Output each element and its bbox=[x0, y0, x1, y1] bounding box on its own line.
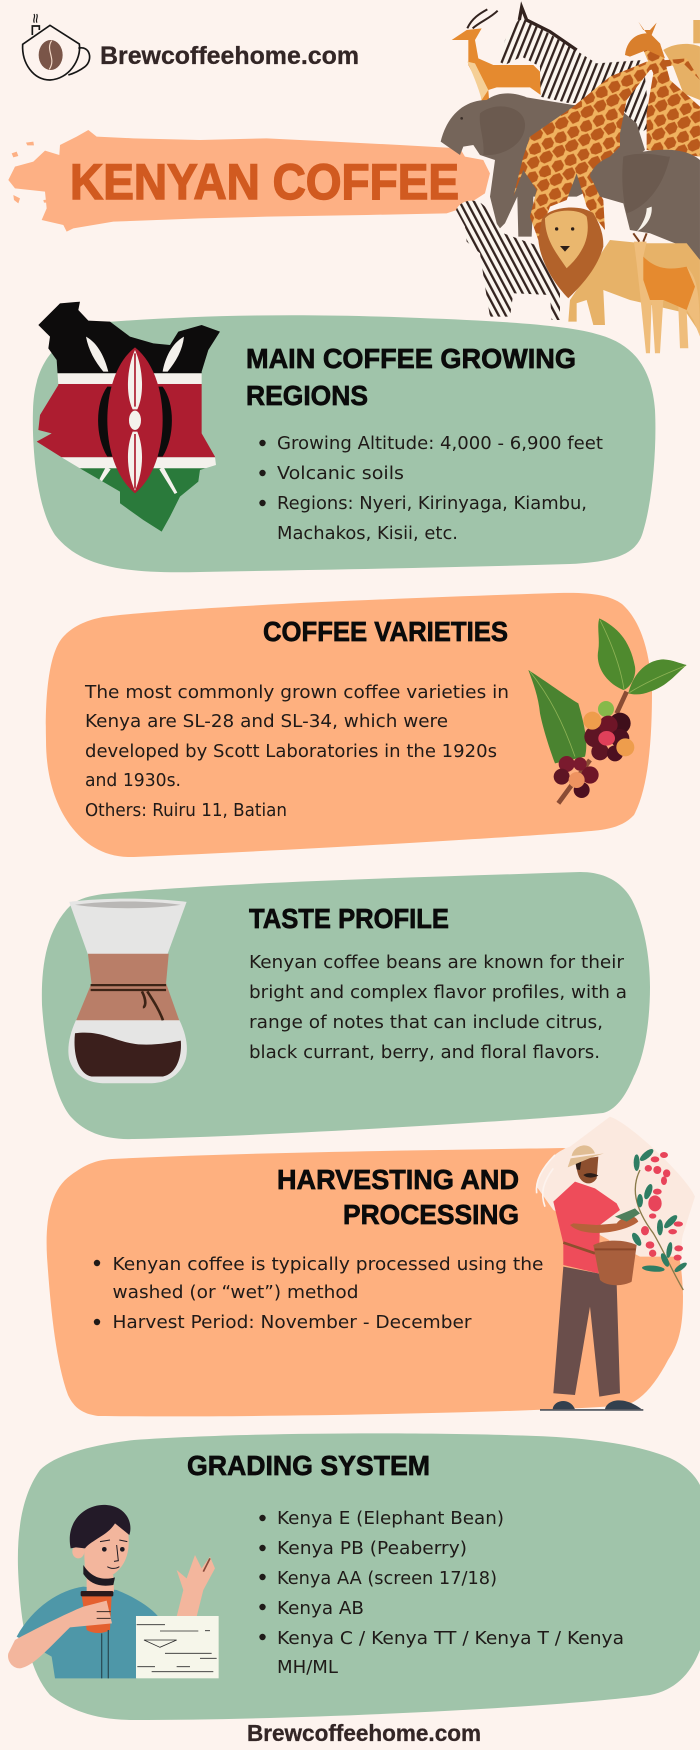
brush stroke bbox=[8, 130, 490, 232]
heading: COFFEE VARIETIES bbox=[263, 616, 508, 647]
bullet list: Kenya PB (Peaberry) bbox=[277, 1539, 467, 1559]
panel: main coffee growing regions bbox=[30, 297, 655, 572]
body text: bright and complex flavor profiles, with a bbox=[249, 983, 627, 1003]
gazelle top bbox=[452, 9, 541, 103]
zebra lower bbox=[456, 201, 560, 320]
heading: MAIN COFFEE GROWING bbox=[246, 343, 576, 374]
body text: range of notes that can include citrus, bbox=[249, 1013, 603, 1033]
body text: black currant, berry, and floral flavors. bbox=[249, 1043, 600, 1063]
panel background bbox=[18, 1433, 700, 1720]
panel: harvesting and processing bbox=[47, 1117, 695, 1416]
bullet list: Harvest Period: November - December bbox=[112, 1313, 472, 1333]
icon: coffee branch bbox=[528, 618, 687, 803]
body text bbox=[84, 683, 509, 821]
bullet list: washed (or “wet”) method bbox=[112, 1283, 358, 1303]
zebra top bbox=[499, 7, 650, 133]
heading: GRADING SYSTEM bbox=[187, 1450, 430, 1481]
body text bbox=[249, 953, 627, 1063]
heading bbox=[277, 1164, 519, 1230]
panel: taste profile bbox=[42, 872, 650, 1139]
title banner bbox=[8, 130, 490, 232]
body text: Kenyan coffee beans are known for their bbox=[249, 953, 625, 973]
bullet list: Volcanic soils bbox=[277, 464, 404, 484]
bullet list bbox=[94, 1255, 544, 1333]
bullet list: Kenya E (Elephant Bean) bbox=[277, 1509, 504, 1529]
body text: The most commonly grown coffee varieties in bbox=[84, 683, 509, 703]
panel background bbox=[47, 1148, 683, 1416]
footer website text: Brewcoffeehome.com bbox=[247, 1720, 481, 1746]
bullet list: Growing Altitude: 4,000 - 6,900 feet bbox=[277, 434, 603, 454]
icon: coffee cup house bbox=[23, 14, 90, 80]
panel background bbox=[42, 872, 650, 1139]
giraffe second bbox=[625, 22, 700, 157]
bullet list: Kenya C / Kenya TT / Kenya T / Kenya bbox=[277, 1629, 624, 1649]
icon: chemex coffee maker bbox=[68, 899, 187, 1083]
body text: Others: Ruiru 11, Batian bbox=[85, 801, 287, 821]
illustration: coffee farmer bbox=[536, 1145, 688, 1410]
bullet list: Regions: Nyeri, Kirinyaga, Kiambu, bbox=[277, 494, 587, 514]
bullet list bbox=[259, 434, 603, 544]
heading: REGIONS bbox=[246, 380, 368, 411]
bullet list: Kenya AA (screen 17/18) bbox=[277, 1569, 497, 1589]
body text: and 1930s. bbox=[85, 771, 181, 791]
title: KENYAN COFFEE bbox=[70, 154, 459, 210]
logo text: Brewcoffeehome.com bbox=[100, 42, 359, 70]
bullet list: Kenyan coffee is typically processed using the bbox=[112, 1255, 544, 1275]
lion behind at top right bbox=[663, 44, 700, 100]
bullet list bbox=[259, 1509, 624, 1678]
bullet list: Kenya AB bbox=[277, 1599, 364, 1619]
heading: TASTE PROFILE bbox=[249, 903, 449, 934]
bullet list: MH/ML bbox=[277, 1658, 338, 1678]
bullet list: Machakos, Kisii, etc. bbox=[277, 524, 458, 544]
heading: HARVESTING AND bbox=[277, 1164, 519, 1195]
panel: coffee varieties bbox=[46, 593, 687, 857]
elephant left bbox=[441, 93, 645, 237]
heading: PROCESSING bbox=[343, 1199, 519, 1230]
illustration: man with coffee cup bbox=[8, 1505, 219, 1678]
panel background bbox=[46, 593, 652, 857]
logo bbox=[23, 14, 359, 80]
panel: grading system bbox=[8, 1433, 700, 1720]
icon: Kenya flag map bbox=[36, 302, 220, 532]
heading bbox=[246, 343, 576, 411]
illustration: safari animals bbox=[441, 7, 700, 353]
panel background bbox=[33, 315, 655, 572]
elephant right bbox=[590, 150, 700, 260]
backdrop behind farmer bbox=[537, 1117, 695, 1257]
gazelle lower bbox=[633, 233, 700, 353]
giraffe large bbox=[513, 58, 700, 240]
lion bbox=[538, 207, 700, 333]
body text: Kenya are SL-28 and SL-34, which were bbox=[85, 712, 448, 732]
body text: developed by Scott Laboratories in the 1920s bbox=[85, 742, 497, 762]
